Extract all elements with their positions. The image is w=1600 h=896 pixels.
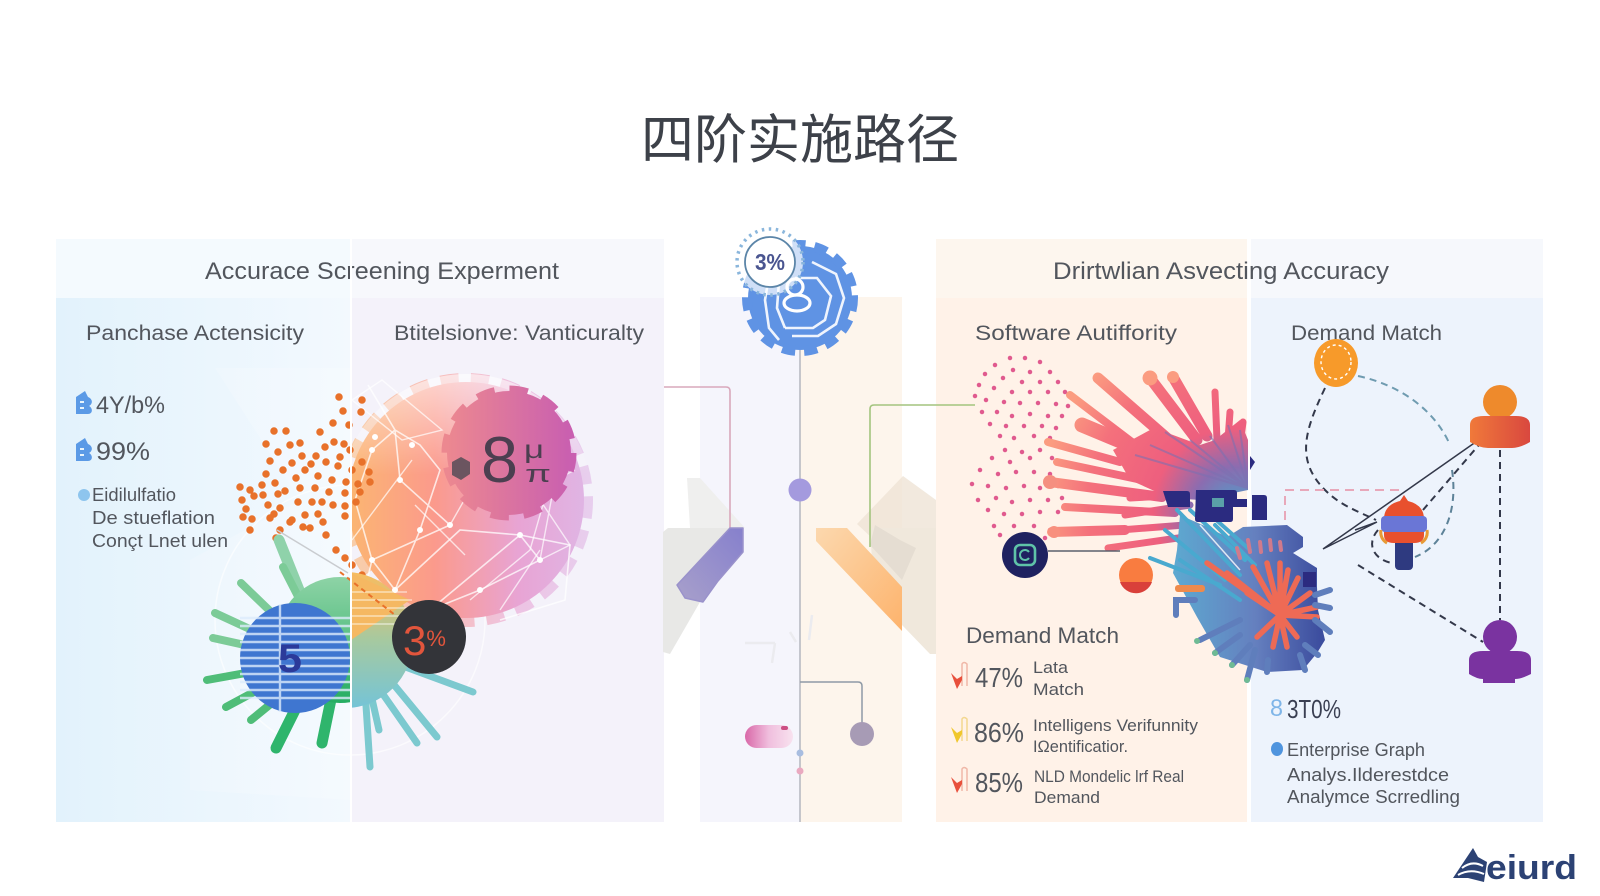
milestone dot: mauve <box>850 722 874 746</box>
subheading: software: Software Autiffority <box>975 322 1178 345</box>
subheading: left column: Panchase Actensicity <box>86 322 305 345</box>
arrow: orange band <box>816 528 902 631</box>
icon: robot node <box>1381 495 1427 570</box>
panel: right accuracy <box>936 239 1543 822</box>
arrow: purple band <box>677 528 743 602</box>
icon: dark teal badge <box>1002 532 1120 578</box>
text block: enterprise graph: Analys.Ilderestdce <box>1287 765 1449 785</box>
icon: blue striped disc: 5 <box>278 637 302 681</box>
stat: 47%: Lata <box>1033 658 1069 677</box>
chart: green blue spiky sphere <box>207 530 473 767</box>
connector: grey branch <box>800 682 862 730</box>
panel: central column <box>700 297 902 822</box>
callout: dark circle 3%: 3 <box>403 617 426 664</box>
stat: 86%: IΩentificatior. <box>1033 737 1128 756</box>
subheading: demand match: Demand Match <box>1291 322 1442 345</box>
fan: navy blocks <box>1163 456 1316 587</box>
icon: gear with 8 <box>447 391 571 515</box>
stat: 30% <box>1270 694 1341 724</box>
icon: orange node <box>1314 339 1358 387</box>
chart: coral radial fan <box>1043 370 1330 680</box>
icon: gear with 8: π <box>525 461 551 488</box>
title: 四阶实施路径 <box>641 111 959 170</box>
heading: right panel: Drirtwlian Asvecting Accuracy <box>1053 258 1389 285</box>
text block: enterprise graph <box>1271 740 1460 807</box>
milestone dot: blue <box>796 750 804 756</box>
fan: orange patch <box>1175 585 1205 592</box>
icon: gear with 8: 8 <box>481 423 518 496</box>
dashed links <box>1285 376 1500 642</box>
chart: network graph <box>1285 339 1531 683</box>
logo: eiurd <box>1486 849 1577 887</box>
faint smudge <box>745 615 812 663</box>
chart: pink dot circles <box>972 358 1068 538</box>
logo <box>1453 848 1577 887</box>
arrow: left grey chevron <box>663 478 745 654</box>
stat: 47%: 47% <box>975 662 1023 693</box>
stat: 85%: NLD Mondelic lrf Real <box>1034 767 1184 786</box>
stat: 47% <box>951 658 1084 699</box>
text block: enterprise graph: Analymce Scrredling <box>1287 787 1460 807</box>
milestone dot: purple <box>788 478 812 502</box>
callout: dark circle 3% <box>392 600 466 674</box>
chart: network gear <box>340 374 592 626</box>
stat: 85%: Demand <box>1034 788 1100 807</box>
solid links <box>1323 432 1490 549</box>
icon: central blue gear <box>737 229 853 351</box>
panel: left screening experiment <box>56 239 664 822</box>
callout: dark circle 3%: % <box>426 626 446 651</box>
fan: teal blue body <box>1173 515 1325 672</box>
stat: 4Y/b%: 4Y/b% <box>96 392 165 419</box>
connector: green <box>870 405 975 547</box>
heading: left panel: Accurace Screening Experment <box>205 258 559 285</box>
icon: orange person <box>1470 385 1530 448</box>
text block: left notes: Eidilulfatio <box>92 485 176 505</box>
stat: 99% <box>76 438 150 466</box>
stat: 86% <box>951 716 1199 756</box>
fan: blue spikes with green tips <box>1176 590 1330 680</box>
text block: left notes: Conçt Lnet ulen <box>92 531 228 551</box>
icon: orange circle <box>1119 558 1153 593</box>
timeline line <box>799 350 801 822</box>
stat: 30%: 3T0% <box>1287 694 1341 724</box>
text block: left notes: De stueflation <box>92 508 215 528</box>
stat: 85%: 85% <box>975 767 1023 798</box>
stat: 86%: 86% <box>974 717 1024 748</box>
icon: gear with 8: μ <box>524 434 544 464</box>
text block: Demand Match stats <box>951 623 1199 807</box>
chart: orange dot cloud <box>240 397 374 590</box>
connector: pink <box>664 387 730 528</box>
stat: 86%: Intelligens Verifunnity <box>1033 716 1199 735</box>
stat: 30%: 8 <box>1270 695 1283 722</box>
stat: 99%: 99% <box>96 438 150 466</box>
subheading: right column: Btitelsionve: Vanticuralty <box>394 322 645 345</box>
fan: teal rays <box>1150 510 1255 600</box>
fan: coral burst rays <box>1207 563 1317 647</box>
badge: 3%: 3% <box>755 249 785 275</box>
icon: logo sail <box>1453 848 1487 882</box>
stat: 85% <box>951 767 1184 807</box>
milestone dot: pink <box>796 768 804 774</box>
pill marker <box>745 725 793 748</box>
icon: blue striped disc <box>240 603 350 713</box>
arrow: right beige chevron <box>857 476 936 654</box>
text block: left notes <box>78 485 228 551</box>
stat: 47%: Match <box>1033 680 1084 699</box>
text block: enterprise graph: Enterprise Graph <box>1287 740 1425 760</box>
icon: purple person <box>1469 620 1531 683</box>
heading: Demand Match: Demand Match <box>966 623 1119 648</box>
